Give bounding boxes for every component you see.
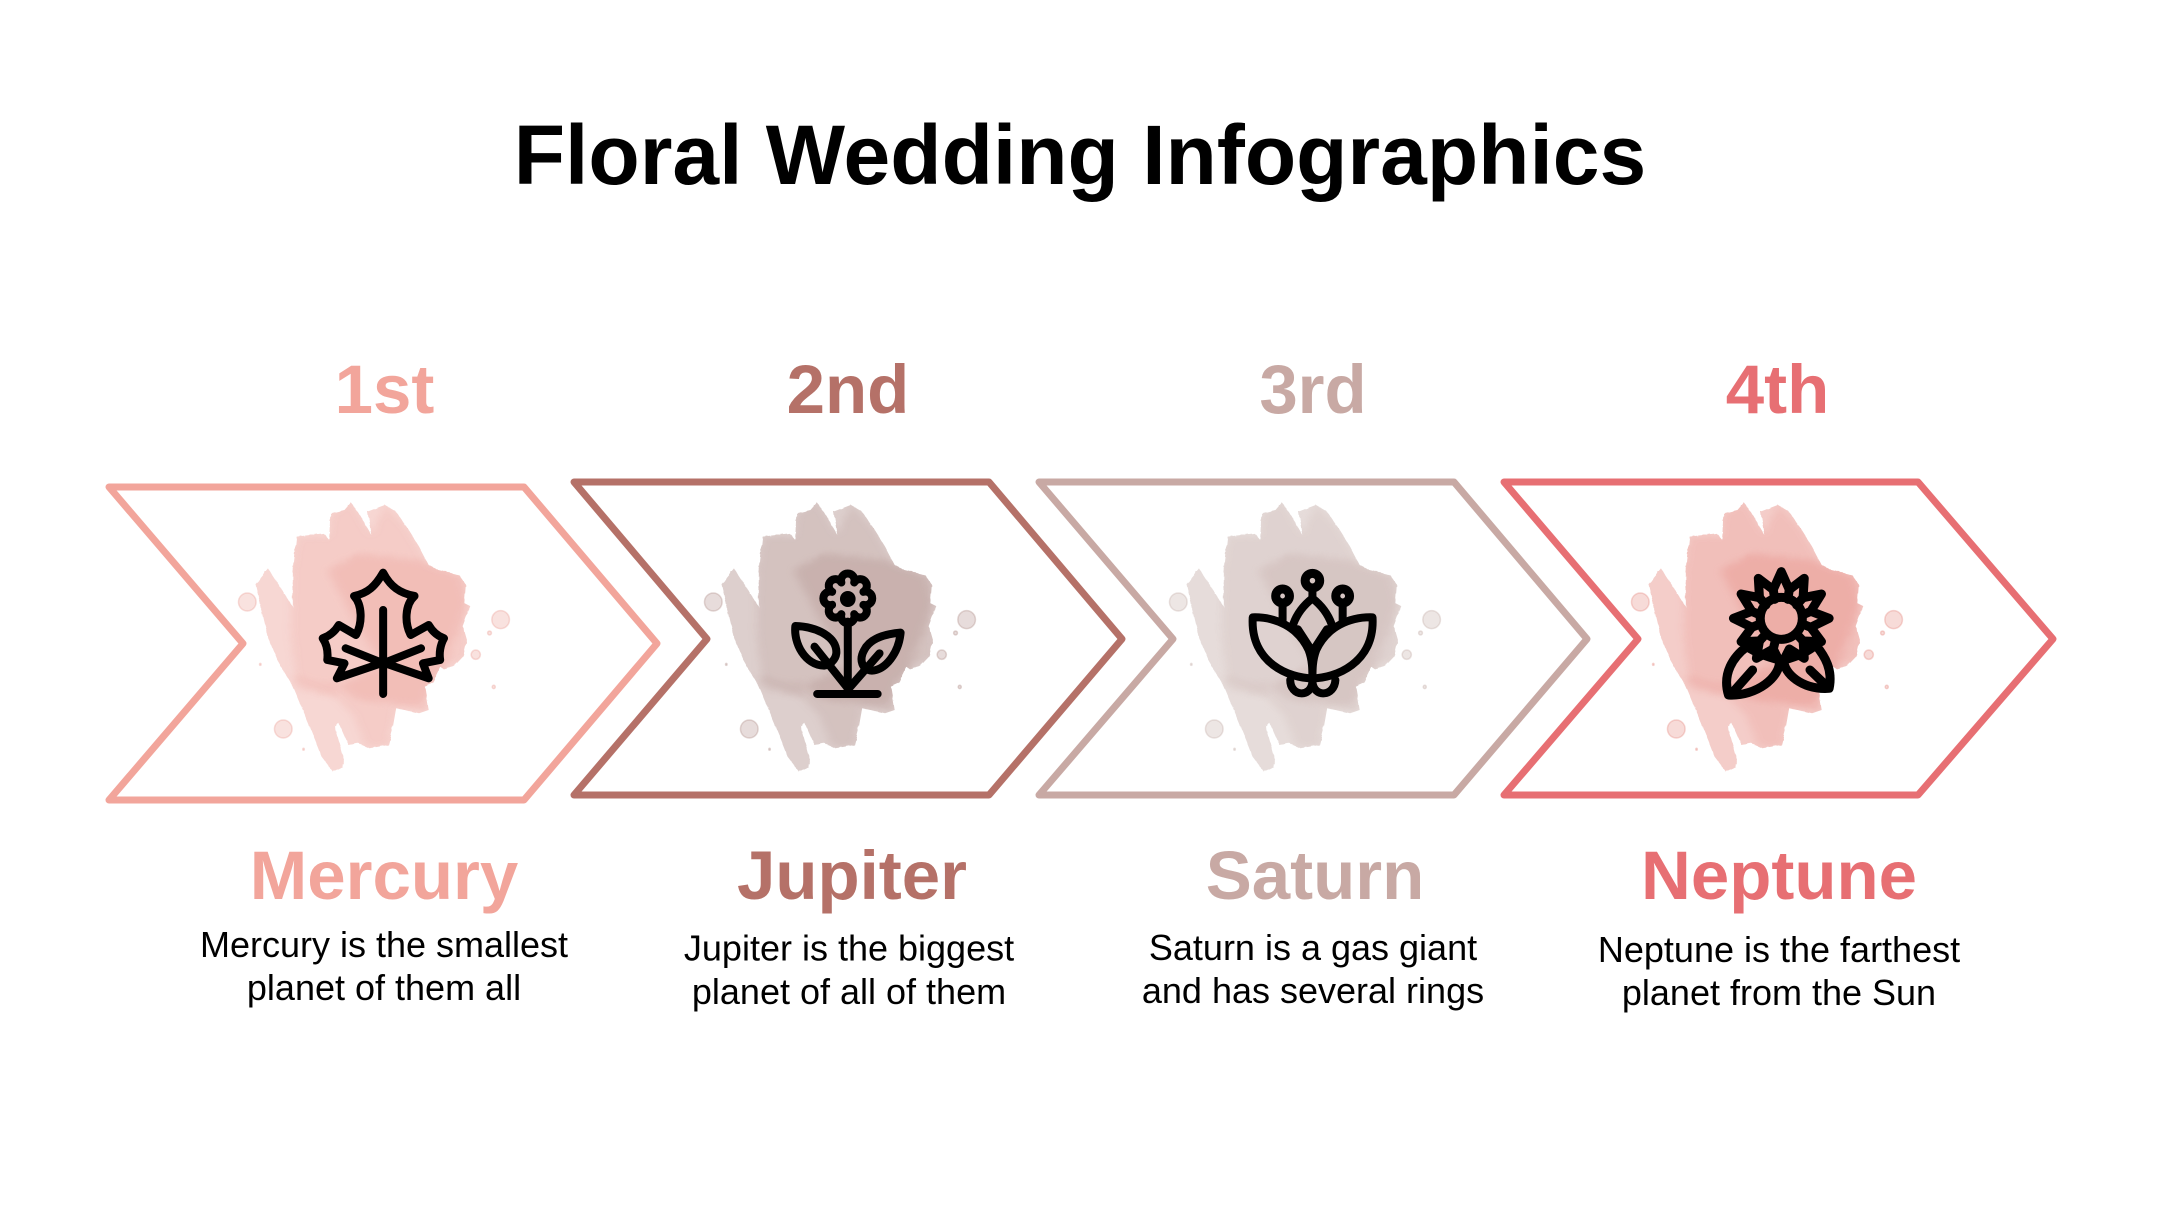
icon: flower with leaves — [795, 574, 901, 694]
watercolor blob: Jupiter — [704, 500, 975, 772]
ordinal: 2nd: 2nd — [787, 351, 909, 428]
description: Saturn: and has several rings — [1142, 970, 1484, 1011]
description: Neptune: Neptune is the farthest — [1598, 929, 1960, 970]
planet name: Saturn: Saturn — [1206, 837, 1424, 914]
step 4: Neptune — [1504, 351, 2053, 1013]
planet name: Mercury: Mercury — [250, 837, 518, 914]
planet name: Neptune: Neptune — [1641, 837, 1917, 914]
ordinal: 4th: 4th — [1726, 351, 1829, 428]
icon: lotus — [1253, 573, 1373, 693]
title: Floral Wedding Infographics — [514, 108, 1646, 202]
step 3: Saturn — [1039, 351, 1587, 1011]
icon: sunflower — [1727, 572, 1830, 695]
chevron: Neptune — [1504, 482, 2053, 795]
watercolor blob: Mercury — [238, 500, 509, 772]
watercolor blob: Neptune — [1631, 500, 1902, 772]
description: Jupiter: planet of all of them — [692, 971, 1006, 1012]
description: Mercury: planet of them all — [247, 967, 521, 1008]
description: Mercury: Mercury is the smallest — [200, 924, 568, 965]
description: Saturn: Saturn is a gas giant — [1149, 927, 1477, 968]
chevron: Mercury — [109, 487, 657, 800]
step 2: Jupiter — [574, 351, 1122, 1012]
watercolor blob: Saturn — [1169, 500, 1440, 772]
planet name: Jupiter: Jupiter — [737, 837, 967, 914]
description: Jupiter: Jupiter is the biggest — [684, 928, 1014, 968]
step 1: Mercury — [109, 351, 657, 1008]
icon: maple leaf — [323, 573, 444, 694]
chevron: Jupiter — [574, 482, 1122, 795]
ordinal: 3rd: 3rd — [1259, 351, 1367, 428]
description: Neptune: planet from the Sun — [1622, 972, 1936, 1013]
chevron: Saturn — [1039, 482, 1587, 795]
ordinal: 1st: 1st — [335, 351, 434, 428]
